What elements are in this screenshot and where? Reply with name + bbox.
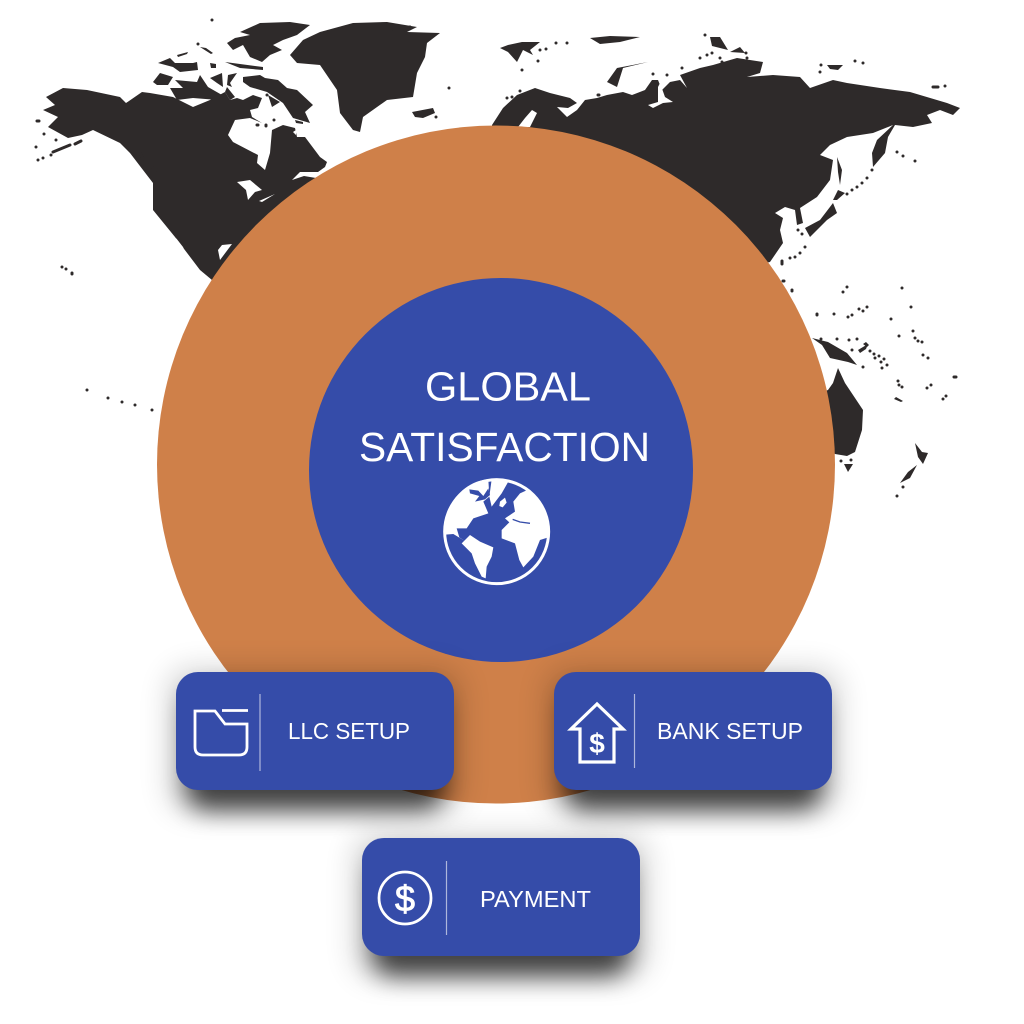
Japan and Sakhalin [805, 157, 845, 237]
North America [43, 88, 330, 300]
Australia and New Guinea [812, 338, 903, 472]
card: payment [352, 832, 650, 980]
blue inner circle [309, 278, 693, 662]
icon: dollar coin [379, 872, 431, 924]
Greenland [290, 22, 440, 132]
card: bank setup [544, 666, 842, 814]
icon: folder [195, 710, 248, 755]
small islands [36, 20, 956, 496]
title [359, 364, 650, 470]
Iceland [412, 108, 435, 118]
orange outer circle [157, 126, 835, 804]
inland seas (white cut-outs) [176, 83, 673, 263]
label: bank setup: BANK SETUP [657, 718, 803, 744]
world map [36, 20, 960, 496]
label: LLC setup: LLC SETUP [288, 718, 410, 744]
Novaya Zemlya, Svalbard and northern islands [500, 36, 843, 87]
Arctic Canada islands [153, 22, 313, 124]
New Zealand [900, 443, 928, 483]
title: SATISFACTION [359, 424, 650, 470]
icon: globe [444, 479, 549, 584]
label: payment: PAYMENT [480, 886, 591, 912]
title: GLOBAL [425, 364, 591, 410]
Eurasia [490, 58, 960, 300]
icon: house with dollar: $ [589, 728, 605, 759]
icon: dollar coin: $ [395, 878, 415, 919]
card: LLC setup [166, 666, 464, 814]
icon: house with dollar [571, 704, 623, 762]
